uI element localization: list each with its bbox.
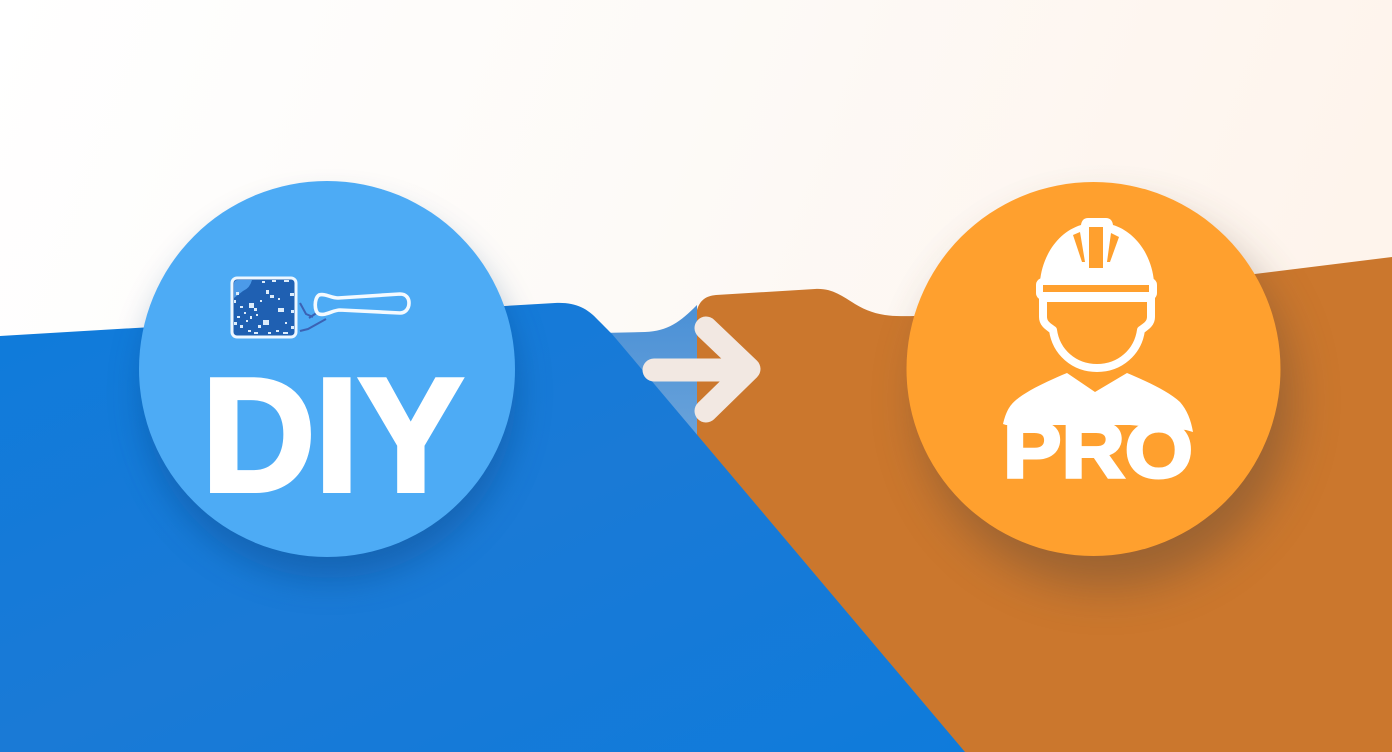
PRO badge	[906, 182, 1280, 556]
PRO circle	[906, 182, 1280, 556]
DIY badge	[139, 181, 515, 557]
head outline	[1043, 298, 1151, 368]
helmet brim slit	[1043, 285, 1149, 292]
orange shape: pro side	[680, 257, 1392, 752]
shadow: DIY circle	[144, 206, 516, 578]
shoulders	[1003, 373, 1193, 432]
roller wire	[300, 303, 326, 331]
arrow	[654, 328, 749, 411]
DIY circle	[139, 181, 515, 557]
PRO label: PRO	[1003, 405, 1193, 494]
blue shape: DIY side	[0, 303, 965, 752]
roller square	[232, 278, 296, 337]
roller handle	[315, 294, 409, 314]
connector band between the two shapes	[600, 305, 697, 440]
helmet brim	[1036, 278, 1157, 300]
icon: worker in hard hat	[1003, 218, 1193, 494]
shadow: PRO circle	[920, 214, 1292, 586]
DIY label: DIY	[202, 346, 463, 526]
icon: paint roller	[232, 278, 409, 337]
roller speckles	[234, 280, 294, 334]
helmet dome	[1040, 218, 1154, 282]
helmet vents	[1073, 227, 1119, 268]
roller light patch	[234, 280, 252, 298]
